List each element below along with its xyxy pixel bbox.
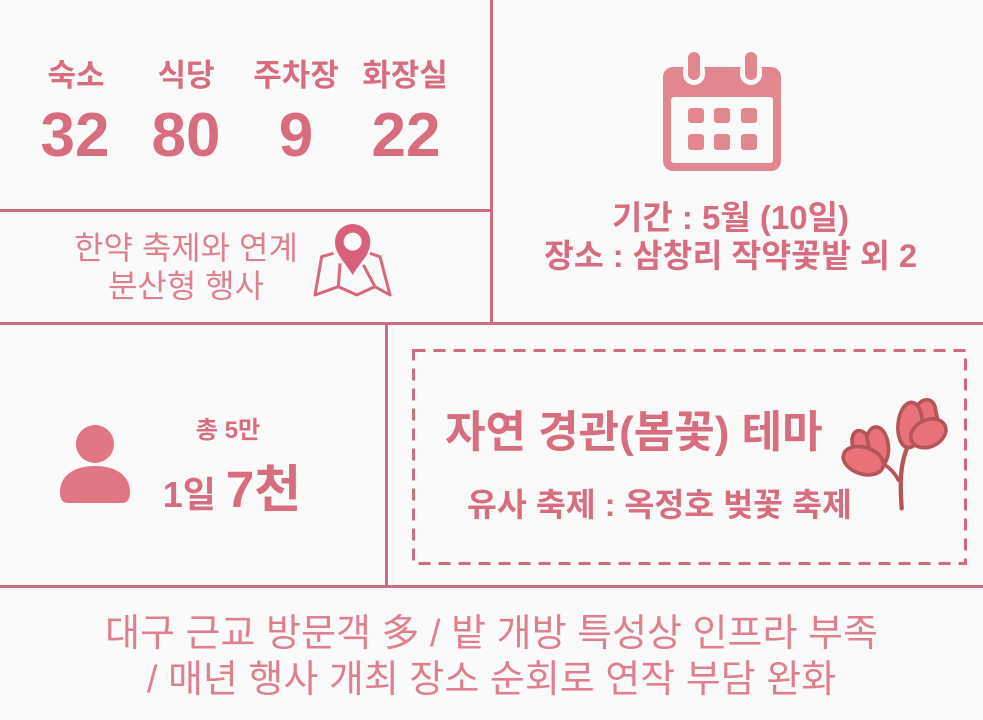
dashed border — [412, 349, 967, 565]
label: parking: 주차장 — [253, 58, 339, 93]
text block: bottom summary — [105, 613, 878, 701]
text: linked festival description: 한약 축제와 연계 — [74, 230, 298, 266]
text: location: 장소 : 삼창리 작약꽃밭 외 2 — [544, 238, 917, 274]
panel: period and location — [544, 52, 917, 274]
text block: bottom summary: / 매년 행사 개최 장소 순회로 연작 부담 완화 — [147, 659, 836, 701]
text: linked festival description: 분산형 행사 — [108, 268, 264, 304]
panel: nature theme dashed box — [412, 349, 967, 565]
text: total visitors: 총 5만 — [196, 417, 260, 444]
text block: bottom summary: 대구 근교 방문객 多 / 밭 개방 특성상 인프라 부족 — [105, 613, 878, 655]
label: lodging: 숙소 — [47, 58, 105, 93]
panel: visitors — [60, 417, 301, 518]
number: parking: 9 — [279, 101, 313, 170]
panel: facility counts — [41, 58, 448, 170]
text: linked festival description — [74, 230, 298, 304]
icon: person — [60, 425, 130, 503]
number: restaurants: 80 — [152, 101, 220, 170]
text: daily visitors: 1일 7천 — [163, 461, 301, 518]
panel: linked event — [74, 224, 392, 304]
label: restrooms: 화장실 — [362, 58, 448, 93]
icon: tulip flowers — [841, 398, 948, 510]
icon: calendar — [663, 52, 781, 171]
icon: map pin — [314, 224, 392, 297]
label: restaurants: 식당 — [157, 58, 215, 93]
heading: nature theme: 자연 경관(봄꽃) 테마 — [445, 408, 823, 457]
text: similar festival: 유사 축제 : 옥정호 벚꽃 축제 — [467, 487, 852, 523]
number: lodging: 32 — [41, 101, 109, 170]
number: restrooms: 22 — [372, 101, 440, 170]
text: period: 기간 : 5월 (10일) — [612, 199, 849, 236]
